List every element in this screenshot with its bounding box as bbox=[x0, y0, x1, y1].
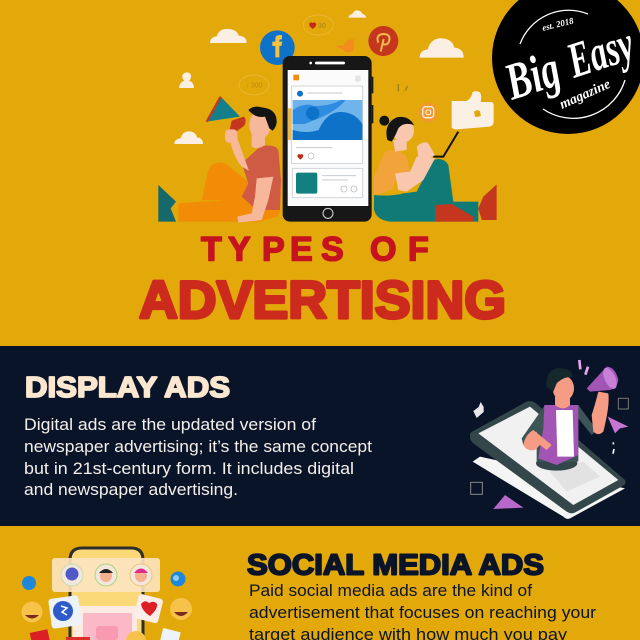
thumbs up bubble bbox=[452, 91, 494, 129]
bird bbox=[336, 39, 355, 52]
blue bubbles bbox=[22, 576, 36, 590]
megaphone bbox=[587, 367, 618, 392]
neck bbox=[252, 132, 265, 148]
logo: Big Easy magazine bbox=[492, 0, 640, 134]
text block: social media ads description: Paid social media ads are the kind of bbox=[249, 582, 532, 600]
sparks bbox=[613, 442, 614, 454]
panel: social media ads bbox=[22, 548, 597, 640]
logo: Big Easy magazine: est. 2018 bbox=[541, 15, 575, 33]
speech bubbles: ↓ 300 bbox=[245, 83, 263, 90]
logo: Big Easy magazine: magazine bbox=[558, 77, 613, 113]
text block: display ads description: but in 21st-century form. It includes digital bbox=[24, 460, 354, 478]
hero illustration bbox=[158, 10, 497, 223]
megaphone bbox=[207, 97, 240, 122]
title line: types of: TYPESOF bbox=[201, 230, 429, 268]
lower leg bbox=[178, 200, 281, 222]
shirt bbox=[242, 146, 281, 210]
illustration: social phone with emoji bbox=[22, 548, 192, 640]
speech bubbles: 30 bbox=[318, 23, 326, 30]
back phone sheet bbox=[473, 457, 625, 519]
phone screen bbox=[478, 407, 618, 505]
man figure bbox=[158, 97, 281, 223]
tile icons bbox=[48, 595, 82, 629]
speech bubbles bbox=[239, 15, 333, 95]
clouds bbox=[174, 10, 464, 144]
small notes bbox=[398, 84, 407, 91]
thumbs icons bbox=[473, 402, 484, 418]
heading: display ads: DISPLAY ADS bbox=[25, 372, 230, 404]
logo: Big Easy magazine: Big bbox=[497, 41, 567, 112]
text block: social media ads description bbox=[249, 582, 597, 640]
left foot bbox=[158, 185, 176, 222]
avatar strip bbox=[52, 558, 160, 592]
pink screen bbox=[73, 606, 137, 640]
phone body bbox=[70, 548, 143, 640]
heading: social media ads: SOCIAL MEDIA ADS bbox=[247, 550, 544, 582]
post image bbox=[293, 100, 362, 140]
phone frame bbox=[470, 401, 626, 513]
raised leg bbox=[202, 162, 248, 201]
text block: display ads description bbox=[24, 416, 372, 499]
neck bbox=[393, 140, 407, 152]
head bbox=[249, 111, 271, 139]
right foot bbox=[478, 184, 497, 220]
instagram icon bbox=[418, 102, 438, 122]
title line: advertising: ADVERTISING bbox=[139, 271, 506, 330]
raised arm bbox=[230, 138, 249, 171]
arm bbox=[395, 157, 435, 192]
exclamation marks bbox=[579, 360, 588, 375]
shirt bbox=[374, 150, 410, 195]
text block: display ads description: Digital ads are the updated version of bbox=[24, 416, 316, 434]
central phone bbox=[283, 56, 373, 222]
text block: display ads description: newspaper advertising; it’s the same concept bbox=[24, 438, 372, 456]
text block: display ads description: and newspaper advertising. bbox=[24, 481, 238, 499]
illustration: man emerging from phone bbox=[470, 360, 628, 519]
text block: social media ads description: advertisement that focuses on reaching your bbox=[249, 604, 597, 622]
paper planes bbox=[608, 417, 628, 433]
panel: display ads bbox=[0, 346, 640, 526]
facebook icon bbox=[260, 30, 295, 65]
emojis bbox=[22, 602, 42, 622]
legs bbox=[374, 159, 478, 222]
laptop stand bbox=[433, 132, 458, 157]
user icon bbox=[179, 72, 194, 88]
pinterest icon bbox=[368, 26, 398, 56]
man body bbox=[522, 405, 597, 462]
arm lower bbox=[237, 177, 273, 223]
head bbox=[393, 119, 414, 142]
title bbox=[139, 230, 506, 330]
woman figure bbox=[374, 116, 497, 222]
